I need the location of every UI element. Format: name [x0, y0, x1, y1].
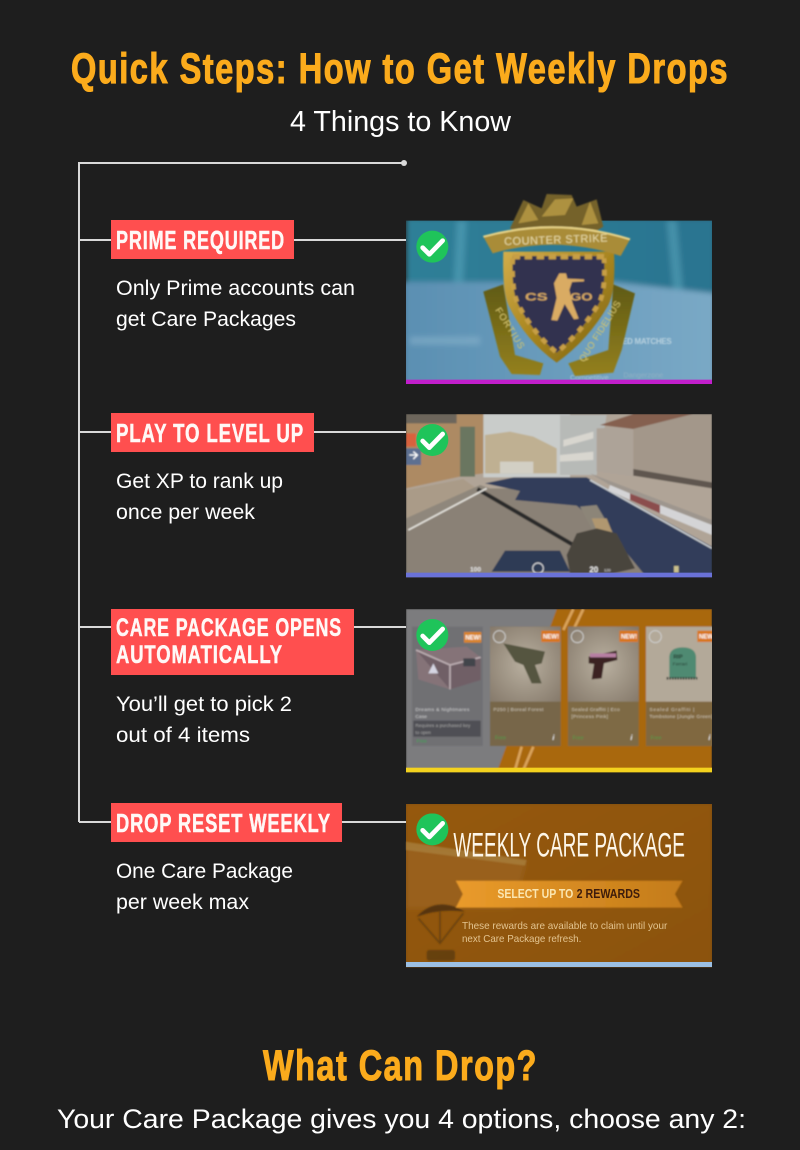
banner [456, 881, 683, 908]
text: care package options: Your Care Package gives you 4 options, choose any 2: [57, 1104, 746, 1134]
step 1: prime required [111, 194, 715, 387]
image: care package item cards: Requires a purchased key [415, 723, 471, 728]
card 4 [644, 701, 712, 747]
image: care package item cards: i [630, 733, 633, 742]
tag: care package opens automatically: CARE PACKAGE OPENS [116, 614, 342, 642]
tag: prime required: PRIME REQUIRED [116, 225, 285, 255]
image: Counter-Strike prime badge [403, 194, 715, 387]
image: care package item cards: Free [495, 735, 506, 741]
image: weekly care package screen: next Care Package refresh. [462, 934, 581, 945]
image: care package item cards: Free [417, 738, 427, 744]
image: gameplay screenshot [406, 414, 712, 577]
tag: prime required [111, 220, 294, 259]
image: care package item cards: NEW! [543, 634, 559, 640]
text: level up description [116, 470, 283, 524]
image: weekly care package screen: These rewards are available to claim until your [462, 921, 668, 932]
image: Counter-Strike prime badge: CS [525, 292, 548, 304]
image: Counter-Strike prime badge: QUO FIDELIUS [577, 299, 623, 364]
tag: play to level up [111, 413, 314, 452]
text: pick description: out of 4 items [116, 724, 250, 747]
icon: green check [416, 424, 448, 456]
image: care package item cards: NEW! [465, 635, 481, 641]
tag: care package opens automatically: AUTOMATICALLY [116, 641, 283, 669]
image: care package item cards: Ferrari [673, 662, 687, 668]
text: pick description [116, 693, 292, 747]
icon: green check [416, 231, 448, 263]
badge lower wings [483, 284, 543, 375]
card 3 [568, 627, 639, 746]
step 3: care package opens [111, 609, 717, 772]
tag: drop reset weekly [111, 803, 342, 842]
image: care package item cards [406, 609, 717, 772]
image: weekly care package screen: 2 REWARDS [577, 887, 640, 901]
text: pick description: You’ll get to pick 2 [116, 693, 292, 716]
text: level up description: once per week [116, 501, 255, 524]
text: weekly limit description [116, 860, 293, 914]
tag: drop reset weekly: DROP RESET WEEKLY [116, 808, 331, 838]
pistol and hand [580, 504, 613, 532]
tag: play to level up: PLAY TO LEVEL UP [116, 418, 304, 448]
image: care package item cards: to open [415, 730, 431, 735]
card 2 [490, 627, 561, 746]
image: Counter-Strike prime badge: Dangerzone [623, 370, 663, 379]
text: weekly limit description: per week max [116, 891, 250, 914]
soldier silhouette [551, 273, 584, 321]
image: Counter-Strike prime badge: FORTIUS [493, 306, 527, 351]
text: level up description: Get XP to rank up [116, 470, 283, 493]
image: care package item cards: Sealed Graffiti | [649, 707, 694, 713]
image: gameplay screenshot: 20 [589, 565, 599, 574]
tag: care package opens automatically [111, 609, 354, 675]
image: gameplay screenshot: 120 [604, 568, 611, 573]
image: Counter-Strike prime badge: KED MATCHES [617, 337, 672, 346]
image: care package item cards: RIP [673, 654, 683, 660]
image: care package item cards: Tombstone [Jungle Green] [649, 714, 713, 720]
step 4: drop reset weekly [111, 801, 715, 971]
ribbon [483, 227, 630, 256]
badge crest [510, 194, 603, 235]
image: care package item cards: Dreams & Nightmares [415, 707, 470, 713]
subtitle: 4 Things to Know [290, 106, 512, 138]
image: Counter-Strike prime badge: GO [570, 292, 593, 304]
heading: what can drop: What Can Drop? [263, 1042, 538, 1090]
image: care package item cards: NEW! [621, 634, 637, 640]
image: care package item cards: Free [651, 735, 662, 741]
image: care package item cards: NEW! [699, 634, 715, 640]
image: care package item cards: Sealed Graffiti | Eco [571, 707, 620, 713]
image: care package item cards: i [708, 733, 711, 742]
image: weekly care package screen: SELECT UP TO [497, 887, 573, 901]
icon: green check [416, 619, 448, 651]
image: care package item cards: P250 | Boreal Forest [493, 707, 544, 713]
shield frame [503, 252, 614, 363]
image: care package item cards: Free [573, 735, 584, 741]
timeline connector lines [79, 160, 407, 822]
image: care package item cards: [Princess Pink] [571, 714, 609, 720]
image: care package item cards: Case [415, 714, 427, 720]
image: Counter-Strike prime badge: COUNTER STRIKE [504, 233, 608, 248]
card 1 [412, 627, 483, 746]
icon: green check [416, 813, 448, 845]
text: prime description [116, 277, 355, 331]
text: prime description: Only Prime accounts can [116, 277, 355, 300]
text: prime description: get Care Packages [116, 308, 296, 331]
image: gameplay screenshot: 100 [470, 567, 481, 574]
image: Counter-Strike prime badge: Competitive [570, 373, 609, 382]
image: care package item cards: i [552, 733, 555, 742]
step 2: play to level up [111, 413, 712, 577]
image: weekly care package screen [403, 801, 715, 971]
text: weekly limit description: One Care Package [116, 860, 293, 883]
